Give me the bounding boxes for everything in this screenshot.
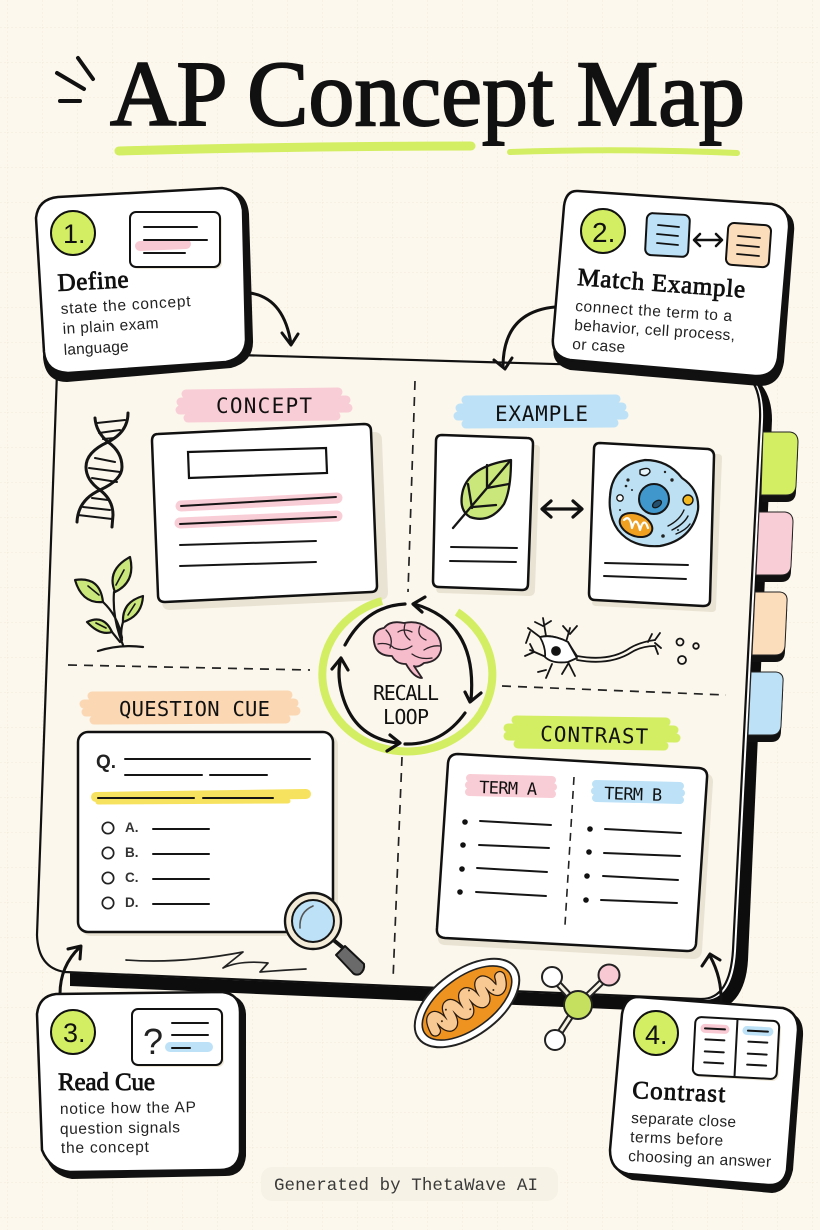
tab: pink [756,512,793,582]
footer credit [261,1167,558,1201]
description: contrast step [628,1110,771,1171]
tab: blue [747,672,783,742]
answer options: A. [125,820,138,835]
tabs [747,432,798,742]
panel: contrast [437,720,713,959]
step number 2 [581,209,625,253]
description: define: in plain exam [62,315,159,338]
recall label [373,681,439,729]
notebook panel [37,350,798,1013]
icon: DNA helix [77,413,128,527]
description: read cue [60,1099,196,1157]
icon: question note [132,1009,224,1067]
step number 4 [634,1011,678,1055]
card: question: Q. [96,752,116,773]
icon: comparison book [692,1017,781,1081]
heading: question cue: QUESTION CUE [119,697,270,721]
term A: TERM A [479,778,537,800]
arrow: define to notebook [250,293,298,345]
description: match example: behavior, cell process, [574,317,736,344]
card: comparison [437,754,713,959]
description: contrast step: terms before [630,1129,723,1150]
description: read cue: question signals [60,1119,180,1138]
heading: match example: Match Example [577,264,746,304]
answer options [102,820,138,910]
step 3: read cue [37,946,246,1179]
description: read cue: the concept [61,1139,150,1157]
title text: AP Concept Map [110,43,745,146]
step number 3 [51,1010,95,1054]
term B: TERM B [604,784,662,806]
icon: plant sprout [75,557,143,651]
description: contrast step: choosing an answer [628,1148,771,1171]
description: read cue: notice how the AP [60,1099,196,1118]
recall label: RECALL [373,681,439,705]
panel: recall loop [322,597,492,751]
icon: double arrow [542,501,582,517]
section dividers [68,381,726,980]
arrow: match example to notebook [494,307,555,369]
arrow: contrast to notebook [702,954,721,1002]
step 2: match example [494,191,794,386]
icon: matched notes [645,213,771,267]
panel: concept [75,392,388,651]
step number 1 [51,211,95,255]
step 4: contrast [610,954,803,1193]
description: define [60,293,192,359]
squiggle [126,952,306,972]
heading: contrast step: Contrast [632,1077,726,1108]
icon: animal cell [610,460,698,546]
step number 4: 4. [645,1020,668,1050]
answer options: C. [125,870,138,885]
step 1: define [36,188,298,382]
heading: define: Define [57,266,129,297]
icon: note card [130,212,222,269]
title underline [119,146,737,153]
icon: neuron [525,618,699,678]
description: define: language [63,338,129,359]
description: contrast step: separate close [631,1110,736,1131]
card: definition [152,424,388,610]
card: cell example [589,443,722,612]
title [57,43,745,153]
icon: brain [374,622,441,678]
step number 1: 1. [63,219,86,249]
icon: question note: ? [143,1021,163,1062]
lime brush ring [322,601,492,751]
icon: mitochondrion [399,941,535,1065]
icon: molecule [542,964,620,1050]
step number 3: 3. [63,1018,86,1048]
icon: leaf [453,460,511,528]
loop arrows [332,597,481,751]
icon: burst marks [57,58,93,101]
tab: green [761,432,798,502]
heading: read cue: Read Cue [58,1069,155,1096]
recall label: LOOP [383,705,429,729]
answer options: D. [125,895,138,910]
description: match example: or case [572,336,626,356]
card: question [78,732,338,936]
term A [469,778,553,800]
arrow: read cue to notebook [60,946,81,994]
description: define: state the concept [60,293,192,318]
panel: example [433,399,722,678]
step number 2: 2. [592,217,615,248]
heading: contrast: CONTRAST [540,722,649,749]
tab: orange [751,592,787,662]
term B [595,784,681,806]
answer options: B. [125,845,138,860]
icon: magnifier [284,892,364,975]
description: match example [572,298,736,356]
card: leaf example [433,435,540,596]
panel: question cue [78,695,364,975]
footer credit: Generated by ThetaWave AI [274,1176,538,1196]
heading: example: EXAMPLE [495,402,588,426]
heading: concept: CONCEPT [216,394,312,418]
description: match example: connect the term to a [575,298,733,325]
